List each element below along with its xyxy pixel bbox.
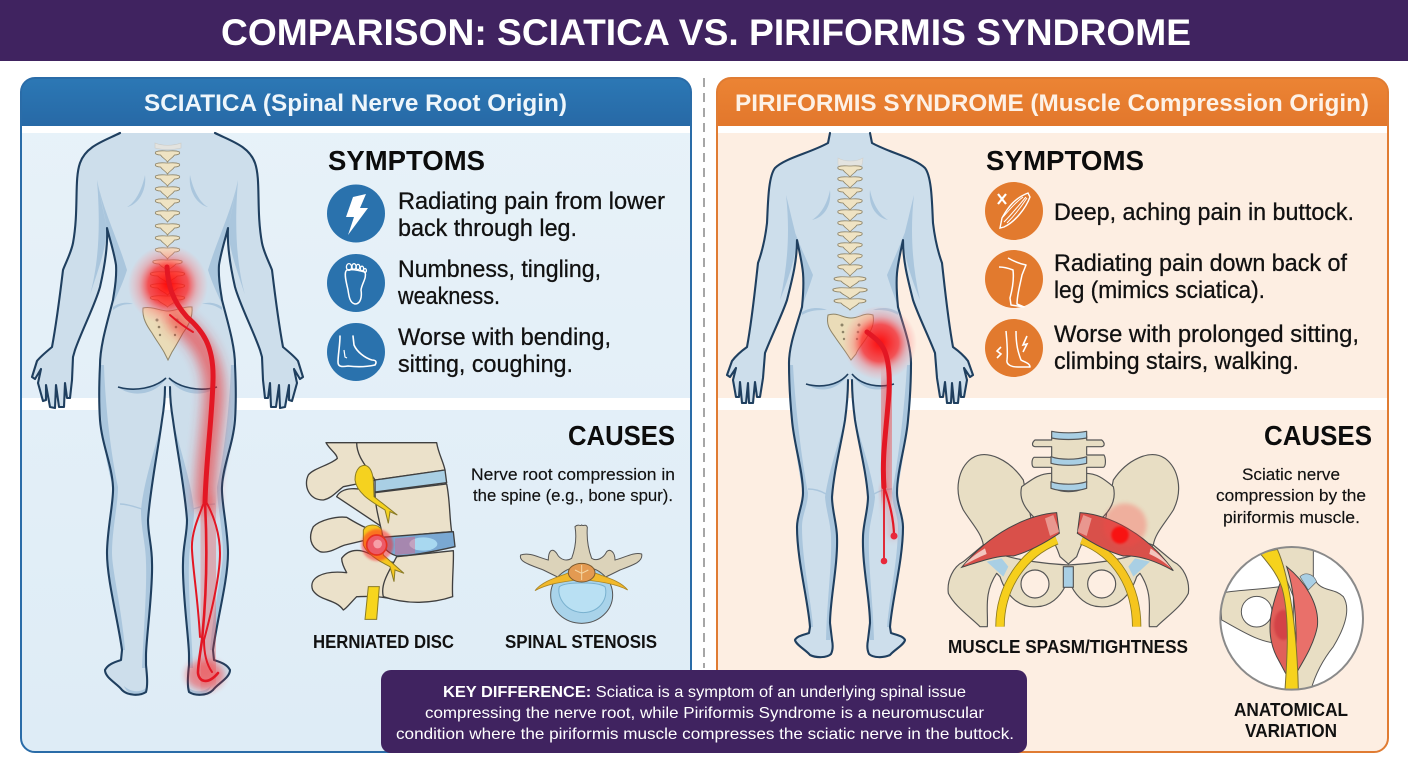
causes description: Sciatic nerve — [1242, 465, 1340, 484]
symptom: radiating pain — [327, 184, 665, 242]
symptom: worse with bending: sitting, coughing. — [398, 351, 573, 378]
pain glow: buttock — [843, 306, 917, 380]
symptom: radiating pain — [985, 250, 1347, 308]
icon: lower leg with pain sparks — [985, 319, 1043, 377]
illustration: herniated disc — [306, 443, 455, 619]
label: herniated disc: HERNIATED DISC — [313, 631, 454, 652]
symptom: numbness — [327, 254, 601, 312]
symptom: radiating pain: back through leg. — [398, 215, 577, 242]
panel header: sciatica: SCIATICA (Spinal Nerve Root Origin) — [144, 90, 567, 117]
symptom: worse with sitting — [985, 319, 1359, 377]
symptom: radiating pain: Radiating pain from lower — [398, 188, 665, 215]
panel: sciatica — [21, 78, 691, 752]
causes description: the spine (e.g., bone spur). — [473, 486, 673, 505]
causes description — [1216, 465, 1366, 527]
spine — [827, 158, 873, 360]
symptom: numbness: weakness. — [397, 283, 500, 310]
spine — [143, 143, 192, 360]
causes description: Nerve root compression in — [471, 465, 675, 484]
sciatic nerve pain path — [167, 267, 224, 690]
symptom: worse with sitting: Worse with prolonged sitting, — [1054, 321, 1359, 348]
symptom: radiating pain: leg (mimics sciatica). — [1054, 277, 1265, 304]
icon: muscle — [985, 182, 1043, 240]
key difference callout — [381, 670, 1027, 753]
illustration: spinal stenosis — [520, 525, 642, 623]
label: anatomical variation: ANATOMICAL — [1234, 699, 1348, 720]
panel header: sciatica — [21, 78, 691, 126]
symptom: worse with bending: Worse with bending, — [398, 324, 611, 351]
causes heading: CAUSES — [1264, 420, 1372, 451]
symptoms heading: SYMPTOMS — [328, 145, 485, 176]
icon: lightning bolt — [327, 184, 385, 242]
title banner: COMPARISON: SCIATICA VS. PIRIFORMIS SYNDROME — [221, 11, 1191, 53]
symptom: worse with sitting: climbing stairs, walking. — [1054, 348, 1299, 375]
label: anatomical variation — [1234, 699, 1348, 741]
causes description — [471, 465, 675, 505]
symptom: worse with bending — [327, 323, 611, 381]
icon: foot sole — [327, 254, 385, 312]
panel: piriformis syndrome — [717, 78, 1388, 752]
symptom: deep aching pain — [985, 182, 1354, 240]
pain glow: lower back — [128, 245, 208, 325]
key difference callout: condition where the piriformis muscle compresses the sciatic nerve in the buttock. — [396, 726, 1014, 743]
label: anatomical variation: VARIATION — [1245, 720, 1337, 741]
illustration: pelvis with piriformis — [948, 431, 1189, 627]
key difference callout: compressing the nerve root, while Piriformis Syndrome is a neuromuscular — [425, 705, 985, 722]
causes heading: CAUSES — [568, 420, 675, 451]
symptom: deep aching pain: Deep, aching pain in buttock. — [1054, 199, 1354, 226]
label: muscle spasm: MUSCLE SPASM/TIGHTNESS — [948, 636, 1188, 657]
icon: bent leg — [985, 250, 1043, 308]
panel header: piriformis syndrome — [717, 78, 1388, 126]
symptoms heading: SYMPTOMS — [986, 145, 1144, 176]
illustration: anatomical variation — [1220, 547, 1363, 693]
figure: piriformis body with spine and nerve — [727, 133, 973, 657]
title banner — [0, 0, 1408, 61]
causes description: piriformis muscle. — [1223, 508, 1360, 527]
label: spinal stenosis: SPINAL STENOSIS — [505, 631, 657, 652]
icon: side foot — [327, 323, 385, 381]
key difference callout: KEY DIFFERENCE: Sciatica is a symptom of an underlying spinal issue — [443, 684, 966, 701]
nerve pain path — [867, 332, 898, 564]
symptom: numbness: Numbness, tingling, — [398, 256, 601, 283]
causes description: compression by the — [1216, 486, 1366, 505]
panel header: piriformis syndrome: PIRIFORMIS SYNDROME (Muscle Compression Origin) — [735, 90, 1369, 117]
figure: sciatica body with spine and nerve — [32, 133, 303, 695]
symptom: radiating pain: Radiating pain down back of — [1054, 250, 1347, 277]
